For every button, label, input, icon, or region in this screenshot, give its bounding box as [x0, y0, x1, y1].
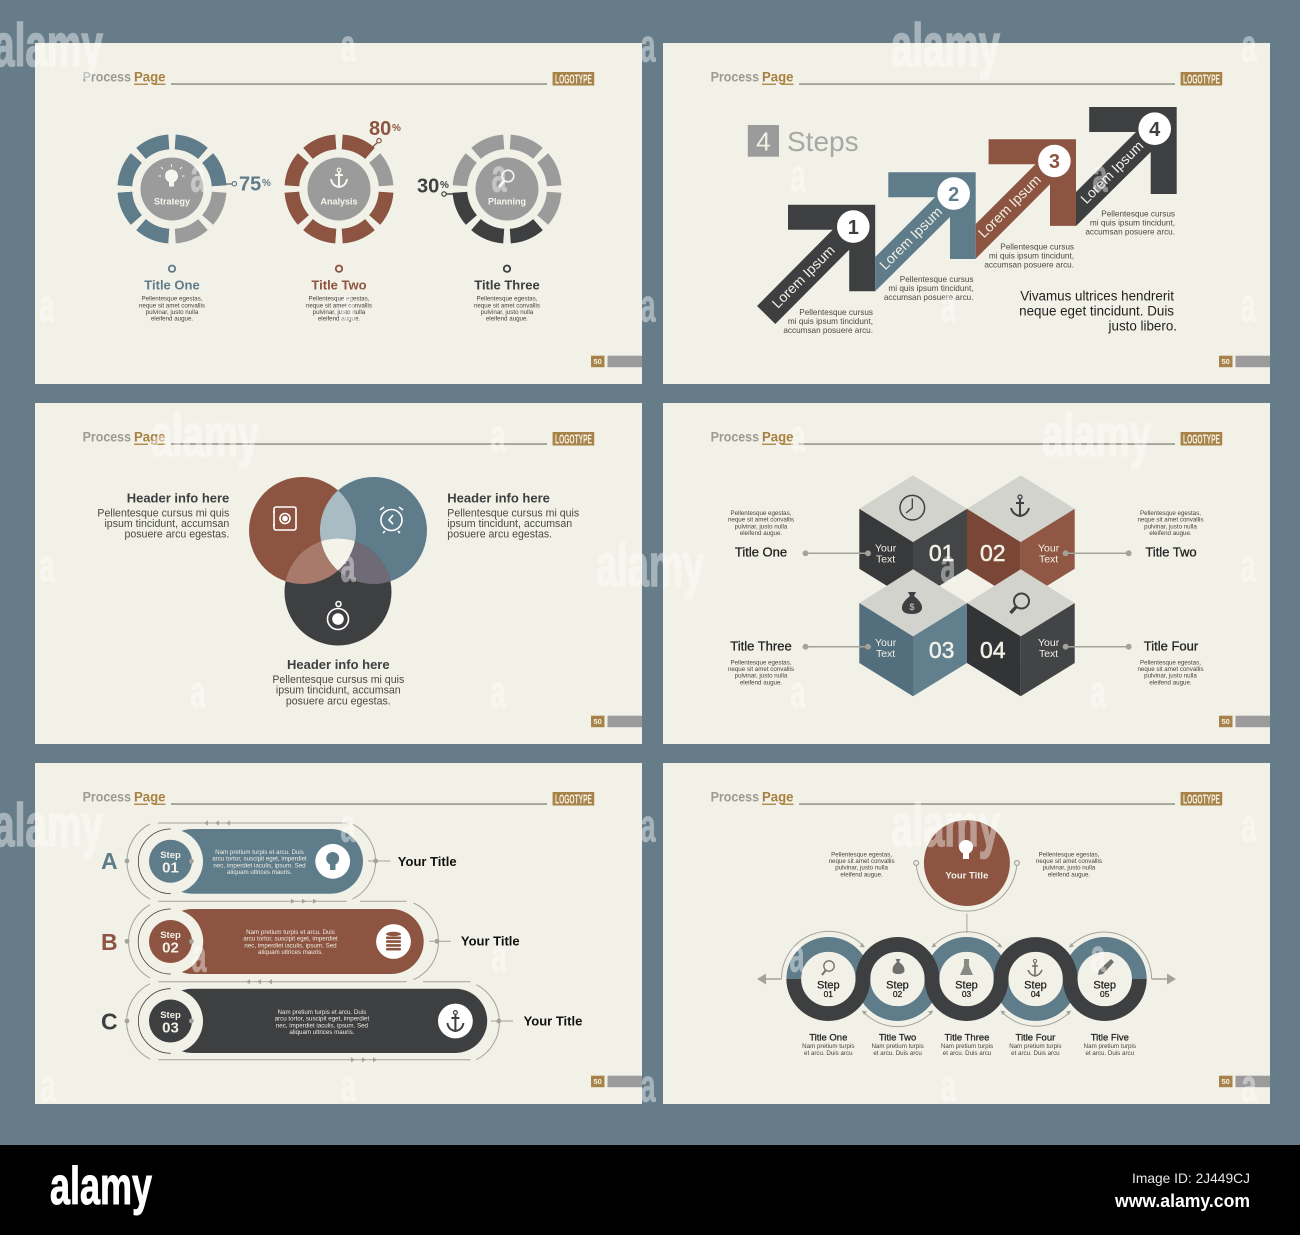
watermark: a	[790, 410, 806, 462]
text: title two: Pellentesque egestas,	[1140, 510, 1201, 517]
step labels: Step	[955, 980, 978, 992]
icons: steps	[822, 959, 1114, 976]
captions: Title Three	[945, 1032, 989, 1044]
slide header: 50	[594, 357, 602, 366]
ring: strategy 75%	[125, 142, 271, 236]
watermark: a	[1242, 1060, 1257, 1112]
pill C: Nam pretium turpis et arcu. Duis	[278, 1009, 366, 1016]
watermark: a	[340, 20, 356, 72]
captions: et arcu. Duis arcu	[804, 1050, 853, 1057]
captions: et arcu. Duis arcu	[873, 1050, 922, 1057]
panel: venn diagram	[35, 403, 642, 744]
watermark: a	[640, 280, 656, 332]
step labels: Step	[1093, 980, 1116, 992]
slide header: Page	[134, 70, 166, 84]
cube 02	[967, 475, 1075, 602]
text: title four: eleifend augue.	[1149, 679, 1192, 686]
text: step 3: mi quis ipsum tincidunt,	[989, 252, 1074, 260]
text: right header: ipsum tincidunt, accumsan	[447, 518, 572, 530]
cube 03	[859, 569, 967, 696]
ring: strategy 75%: Strategy	[154, 196, 190, 206]
text: step 1: accumsan posuere arcu.	[783, 326, 873, 335]
text: bottom header: posuere arcu egestas.	[286, 695, 391, 707]
text: summary	[1019, 288, 1177, 334]
letters: B	[101, 929, 118, 955]
footer logo: alamy	[50, 1157, 152, 1216]
slide header: LOGOTYPE	[555, 792, 592, 806]
letters: C	[101, 1008, 118, 1034]
slide header	[83, 430, 642, 727]
text: title one: Pellentesque egestas,	[731, 510, 792, 517]
text: right header: Pellentesque cursus mi quis	[447, 508, 579, 520]
footer bar	[0, 1145, 1300, 1235]
icon: anchor	[331, 168, 347, 187]
pill B: 02	[162, 940, 179, 957]
text: right header: Header info here	[447, 490, 550, 506]
text: step 3	[984, 242, 1074, 270]
text: title three: Pellentesque egestas,	[731, 659, 792, 666]
cube labels: 04	[980, 637, 1006, 663]
text: title two	[1137, 510, 1204, 560]
slide header: LOGOTYPE	[1183, 72, 1220, 86]
arrow 2	[875, 172, 976, 291]
pill A: Step	[160, 850, 181, 861]
step labels: Step	[1024, 980, 1047, 992]
text block: title three	[474, 266, 540, 323]
text: left header: Pellentesque cursus mi quis	[97, 508, 229, 520]
slide header: 50	[594, 1077, 602, 1086]
wave rings	[794, 944, 1139, 1014]
icon: safe	[273, 507, 296, 530]
text: bottom header: ipsum tincidunt, accumsan	[276, 685, 401, 697]
slide header: Page	[134, 430, 166, 444]
panel: steps pills	[35, 763, 642, 1104]
step labels: Step	[817, 980, 840, 992]
icon: money bag	[902, 592, 922, 614]
text: step 4: accumsan posuere arcu.	[1085, 228, 1175, 236]
cube labels: Your	[875, 542, 897, 554]
text: title two: pulvinar, justo nulla	[1144, 523, 1197, 530]
captions: et arcu. Duis arcu	[1086, 1050, 1135, 1057]
arrow 4: 4	[1149, 119, 1161, 141]
icon: bulb	[315, 844, 350, 879]
text: step 2: accumsan posuere arcu.	[884, 293, 974, 302]
text: title four: neque sit amet convallis	[1137, 666, 1204, 673]
captions: et arcu. Duis arcu	[1011, 1050, 1060, 1057]
step labels: 05	[1100, 989, 1110, 999]
text: title four: pulvinar, justo nulla	[1144, 673, 1197, 680]
text block: title two: neque sit amet convallis	[306, 302, 372, 309]
watermark: alamy	[596, 532, 704, 599]
pill C: arcu tortor, suscipit eget, imperdiet	[275, 1016, 369, 1023]
text: step 1: mi quis ipsum tincidunt,	[788, 317, 873, 326]
arrow 2: Lorem Ipsum	[876, 203, 945, 273]
step labels: 02	[893, 989, 902, 999]
watermark: alamy	[151, 402, 259, 469]
icon: bulb	[158, 164, 184, 186]
pill A: Nam pretium turpis et arcu. Duis	[215, 849, 304, 856]
text block: title three: eleifend augue.	[486, 316, 528, 323]
watermark: a	[640, 1060, 656, 1112]
text: title three: eleifend augue.	[740, 679, 782, 686]
watermark: a	[490, 666, 506, 718]
captions	[802, 1032, 1136, 1057]
text: title four	[1137, 638, 1204, 686]
watermark: a	[1242, 20, 1257, 72]
text: left note: neque sit amet convallis	[829, 858, 895, 865]
watermark: a	[1090, 666, 1106, 718]
pill C	[138, 989, 487, 1053]
slide header: Process	[83, 70, 131, 84]
text block: title one: eleifend augue.	[151, 316, 193, 323]
text: step 1	[783, 308, 873, 335]
slide header	[711, 70, 1270, 367]
panel: five step wave	[663, 763, 1270, 1104]
text block: title one: Title One	[144, 278, 200, 292]
pill A: aliquam ultrices mauris.	[227, 869, 292, 876]
watermark: alamy	[891, 12, 1000, 79]
slide header	[83, 790, 642, 1087]
cube 01	[859, 475, 967, 602]
heading: 4 steps: Steps	[787, 126, 859, 157]
text: step 2: Pellentesque cursus	[900, 275, 974, 284]
text: step 1: Pellentesque cursus	[799, 308, 873, 317]
watermark: a	[340, 800, 356, 852]
slide header: LOGOTYPE	[1183, 792, 1220, 806]
icon: coins	[376, 924, 411, 959]
heading: 4 steps	[748, 125, 859, 157]
panel: cubes	[663, 403, 1270, 744]
text block: title one: Pellentesque egestas,	[142, 295, 203, 302]
text block: title two: Pellentesque egestas,	[309, 295, 370, 302]
arrow 1: Lorem Ipsum	[769, 242, 838, 311]
watermark: a	[1092, 150, 1108, 202]
watermark: a	[40, 280, 55, 332]
callout: 80%: %	[392, 123, 401, 134]
watermark: a	[340, 1060, 356, 1112]
arrow 3: Lorem Ipsum	[975, 171, 1044, 241]
text: summary: Vivamus ultrices hendrerit	[1020, 288, 1174, 304]
text: step 4: Pellentesque cursus	[1101, 210, 1175, 218]
watermark: a	[40, 540, 55, 592]
icon: anchor	[438, 1004, 473, 1038]
pill B	[138, 909, 424, 974]
pill C: nec, imperdiet iaculis, ipsum. Sed	[276, 1022, 369, 1029]
text: step 2	[884, 275, 974, 302]
text: left note: eleifend augue.	[840, 871, 883, 878]
cube labels: 01	[929, 540, 954, 566]
text block: title three: Pellentesque egestas,	[477, 295, 538, 302]
panel: gauge rings	[35, 43, 642, 384]
text block: title three: Title Three	[474, 278, 540, 292]
cube labels: Text	[1039, 554, 1058, 566]
icon: magnifier	[499, 170, 514, 187]
text: left header: Header info here	[127, 490, 229, 506]
watermark: a	[790, 930, 805, 982]
slide header: Page	[134, 790, 166, 804]
pill A: arcu tortor, suscipit eget, imperdiet	[212, 856, 307, 863]
cube labels: Text	[1039, 648, 1058, 660]
pill B: Step	[160, 930, 181, 941]
text: title one: eleifend augue.	[740, 530, 782, 537]
captions: Title Four	[1016, 1032, 1055, 1044]
pill A	[138, 829, 363, 894]
captions: Nam pretium turpis	[1084, 1043, 1136, 1050]
cube labels: Your	[875, 637, 897, 649]
panel: 4 steps arrows	[663, 43, 1270, 384]
watermark: a	[492, 150, 507, 202]
text: right note: neque sit amet convallis	[1036, 858, 1102, 865]
pill B: arcu tortor, suscipit eget, imperdiet	[243, 936, 338, 943]
text: right header: posuere arcu egestas.	[447, 529, 552, 541]
pill C: aliquam ultrices mauris.	[289, 1029, 355, 1036]
cube labels: Text	[876, 554, 895, 566]
pill B: nec, imperdiet iaculis, ipsum. Sed	[244, 942, 337, 949]
image id: Image ID: 2J449CJ	[1132, 1170, 1250, 1186]
slide header: LOGOTYPE	[555, 72, 592, 86]
watermark: a	[340, 540, 356, 592]
text: title one: neque sit amet convallis	[728, 517, 794, 524]
text block: title two: pulvinar, justo nulla	[313, 309, 366, 316]
watermark: a	[640, 20, 656, 72]
text: right note: Pellentesque egestas,	[1039, 851, 1100, 858]
text: summary: neque eget tincidunt. Duis	[1019, 304, 1174, 318]
titles: Your Title	[398, 854, 457, 869]
text block: title three: neque sit amet convallis	[474, 302, 540, 309]
cube labels: 02	[980, 540, 1006, 566]
slide header: LOGOTYPE	[555, 432, 592, 446]
letters: A	[101, 848, 118, 874]
slide header	[711, 430, 1270, 727]
arrow 3: 3	[1049, 151, 1060, 173]
guide lines and arrows	[125, 820, 513, 1062]
text: step 4: mi quis ipsum tincidunt,	[1090, 218, 1175, 228]
titles	[398, 854, 582, 1028]
text: left note: Pellentesque egestas,	[831, 851, 892, 858]
slide header: 50	[594, 717, 602, 726]
text block: title two: Title Two	[311, 278, 367, 292]
text: bottom header: Pellentesque cursus mi quis	[272, 674, 404, 686]
slide header: Page	[762, 790, 794, 804]
text: title three: neque sit amet convallis	[728, 666, 794, 673]
text block: title one	[139, 266, 205, 323]
slide header: Process	[711, 70, 759, 84]
titles: Your Title	[524, 1014, 582, 1028]
captions: Nam pretium turpis	[1009, 1043, 1062, 1050]
flow arrows	[757, 931, 1176, 1027]
text block: title one: pulvinar, justo nulla	[146, 309, 199, 316]
text: step 4	[1085, 210, 1175, 236]
watermark: a	[940, 540, 956, 592]
text: bottom header	[272, 657, 404, 707]
captions: Nam pretium turpis	[871, 1043, 924, 1050]
watermark: a	[190, 666, 206, 718]
connector lines	[803, 551, 1131, 649]
icon: clock	[900, 495, 925, 520]
text: right note: eleifend augue.	[1048, 871, 1090, 878]
slide header	[83, 70, 642, 367]
slide header: Process	[711, 790, 759, 804]
pill B: aliquam ultrices mauris.	[258, 949, 323, 956]
captions: Title One	[809, 1032, 847, 1044]
text: left note	[829, 851, 895, 878]
text: title three: Title Three	[730, 638, 792, 654]
ring: planning 30%	[417, 122, 574, 256]
icon: stopwatch	[328, 602, 348, 630]
text block: title one: neque sit amet convallis	[139, 302, 205, 309]
callout: 75%	[226, 174, 271, 196]
slide header: Process	[711, 430, 759, 444]
arrow 4	[1076, 107, 1177, 226]
slide header: 50	[1222, 357, 1230, 366]
watermark: a	[940, 280, 956, 332]
watermark: alamy	[891, 792, 1000, 859]
step labels: Step	[886, 980, 909, 992]
icon: alarm clock	[380, 507, 403, 533]
step labels: 01	[824, 989, 833, 999]
text: bottom header: Header info here	[287, 657, 390, 672]
text block: title two: eleifend augue.	[318, 316, 360, 323]
venn circles	[249, 477, 427, 646]
arrow 2: 2	[948, 184, 959, 206]
slide header: LOGOTYPE	[1183, 432, 1220, 446]
text: right note	[1036, 851, 1102, 878]
watermark: a	[1240, 540, 1256, 592]
callout: 75%: 75	[239, 174, 261, 196]
text block: title two	[306, 266, 372, 323]
captions: Title Two	[879, 1032, 916, 1044]
callout: 80%: 80	[369, 118, 391, 140]
watermark: a	[940, 1060, 956, 1112]
text: title four: Title Four	[1144, 638, 1199, 654]
text: step 2: mi quis ipsum tincidunt,	[888, 284, 974, 293]
slide header: Process	[83, 430, 131, 444]
heading: 4 steps: 4	[756, 126, 771, 156]
arrow 3	[975, 139, 1076, 259]
cube labels: Your	[1038, 637, 1060, 649]
callout: 30%: %	[440, 180, 449, 191]
cube 04	[967, 569, 1075, 696]
watermark: a	[190, 150, 206, 202]
text: title two: eleifend augue.	[1149, 530, 1192, 537]
callout: 75%: %	[262, 178, 271, 189]
text: step 3: Pellentesque cursus	[1000, 242, 1074, 252]
captions: Nam pretium turpis	[802, 1043, 854, 1050]
text block: title three: pulvinar, justo nulla	[481, 309, 534, 316]
text: title two: Title Two	[1145, 544, 1197, 560]
text: title three: pulvinar, justo nulla	[735, 673, 788, 680]
pill A: nec, imperdiet iaculis, ipsum. Sed	[213, 862, 306, 869]
text: right note: pulvinar, justo nulla	[1043, 865, 1096, 872]
slide header: Page	[762, 70, 794, 84]
slide header: 50	[1222, 717, 1230, 726]
arrow 1	[757, 205, 875, 324]
top circle: Your Title	[945, 870, 988, 882]
arrow 4: Lorem Ipsum	[1077, 137, 1146, 207]
watermark: alamy	[1042, 402, 1151, 469]
watermark: a	[490, 410, 506, 462]
cube labels	[875, 540, 1060, 663]
slide header: Process	[83, 790, 131, 804]
watermark: a	[790, 666, 806, 718]
text: title four: Pellentesque egestas,	[1140, 659, 1201, 666]
cube labels: Your	[1038, 542, 1060, 554]
watermark: a	[492, 930, 507, 982]
watermark: a	[1240, 280, 1256, 332]
text: left note: pulvinar, justo nulla	[835, 865, 888, 872]
callout: 30%	[417, 176, 456, 198]
watermark: a	[790, 150, 806, 202]
text: title three	[728, 638, 794, 686]
slide header: Page	[762, 430, 794, 444]
watermark: a	[40, 1060, 56, 1112]
captions: Title Five	[1091, 1032, 1129, 1044]
icon: bulb	[959, 840, 973, 859]
icon: money bag: $	[909, 602, 915, 612]
arrow 1: 1	[848, 217, 859, 239]
text: left header: ipsum tincidunt, accumsan	[104, 518, 229, 530]
website: www.alamy.com	[1114, 1191, 1250, 1211]
captions: Nam pretium turpis	[941, 1043, 993, 1050]
watermark: a	[1242, 800, 1257, 852]
titles: Your Title	[461, 934, 520, 948]
slide header	[711, 790, 1270, 1087]
cube labels: 03	[929, 637, 954, 663]
watermark: a	[640, 800, 656, 852]
step labels: 03	[962, 989, 971, 999]
ring: analysis 80%: Analysis	[320, 196, 358, 206]
text: right header	[447, 490, 579, 541]
captions: et arcu. Duis arcu	[943, 1050, 992, 1057]
text: left header	[97, 490, 229, 541]
step labels: 04	[1031, 989, 1040, 999]
ring: planning 30%: Planning	[488, 196, 526, 206]
pill C: 03	[162, 1020, 179, 1036]
text: title one: Title One	[735, 544, 787, 560]
icon: anchor	[1011, 495, 1029, 516]
watermark: a	[1090, 930, 1106, 982]
pill A: 01	[162, 860, 179, 876]
callout: 30%: 30	[417, 176, 439, 198]
watermark: a	[192, 930, 207, 982]
step labels	[817, 980, 1116, 999]
icon: magnifier	[1010, 594, 1029, 613]
text: summary: justo libero.	[1108, 318, 1177, 334]
letters	[101, 848, 118, 1034]
top circle	[914, 820, 1019, 933]
watermark: a	[340, 280, 356, 332]
text: title one: pulvinar, justo nulla	[735, 523, 788, 530]
slide header: 50	[1222, 1077, 1230, 1086]
callout: 80%	[368, 118, 401, 151]
pill C: Step	[160, 1010, 181, 1021]
pill B: Nam pretium turpis et arcu. Duis	[246, 929, 335, 936]
ring: analysis 80%	[292, 118, 401, 236]
text: title two: neque sit amet convallis	[1137, 517, 1204, 524]
text: left header: posuere arcu egestas.	[124, 529, 229, 541]
text: title one	[728, 510, 794, 560]
text: step 3: accumsan posuere arcu.	[984, 260, 1074, 270]
cube labels: Text	[876, 648, 895, 660]
